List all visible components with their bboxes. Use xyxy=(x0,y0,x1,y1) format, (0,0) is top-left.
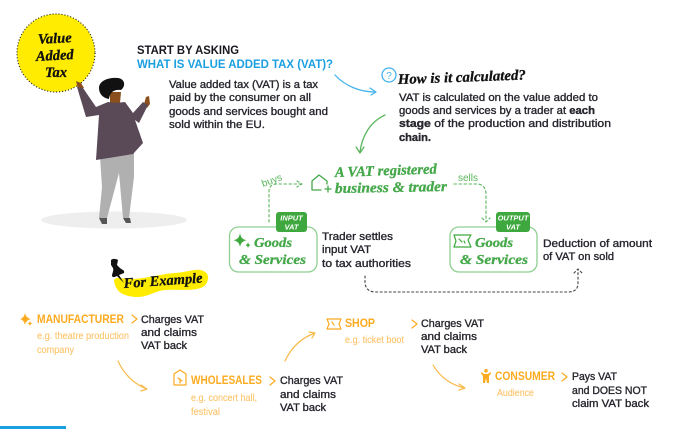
icon: question mark xyxy=(382,68,396,82)
step: manufacturer: Charges VAT xyxy=(141,314,204,326)
step: wholesales: e.g. concert hall, xyxy=(191,393,257,404)
step: consumer: CONSUMER xyxy=(495,371,556,383)
icon: question mark: ? xyxy=(386,71,392,82)
text block: VAT definition: paid by the consumer on all xyxy=(169,92,311,104)
label: goods and services xyxy=(239,236,307,268)
step: shop xyxy=(327,318,484,356)
step: manufacturer: e.g. theatre production xyxy=(37,331,129,342)
arrow: wholesales to shop xyxy=(285,332,315,361)
step: wholesales xyxy=(174,370,343,418)
step: wholesales: Charges VAT xyxy=(280,375,343,387)
heading: for example xyxy=(111,259,208,297)
tag: input VAT: INPUT xyxy=(280,214,304,222)
step: wholesales: and claims xyxy=(280,389,337,401)
label: goods and services: & Services xyxy=(460,253,529,268)
badge: value added tax: Value xyxy=(37,30,73,48)
icon: sparkle xyxy=(20,313,33,326)
text block: VAT definition: Value added tax (VAT) is a tax xyxy=(169,79,318,91)
heading: start by asking xyxy=(137,43,333,71)
text block: VAT definition: goods and services bought and xyxy=(169,106,328,118)
step: shop: VAT back xyxy=(421,344,467,356)
label: goods and services xyxy=(460,236,529,268)
icon: ticket xyxy=(327,319,341,329)
tag: input VAT xyxy=(276,212,307,232)
text block: deduction xyxy=(543,238,652,263)
step: shop: e.g. ticket boot xyxy=(345,335,404,346)
icon: person xyxy=(481,369,491,383)
text block: calculation explanation: VAT is calculated on the value added to xyxy=(399,92,598,104)
step: manufacturer: and claims xyxy=(141,327,198,339)
heading: start by asking: WHAT IS VALUE ADDED TAX (VAT)? xyxy=(137,57,333,71)
arrow: shop to consumer xyxy=(433,365,465,390)
arrow: sells: sells xyxy=(458,173,478,184)
label: goods and services: Goods xyxy=(254,236,293,251)
tag: input VAT: VAT xyxy=(285,222,300,232)
step: shop: and claims xyxy=(421,331,478,343)
icon: house xyxy=(312,175,331,192)
tag: output VAT: OUTPUT xyxy=(498,214,530,222)
icon: push pin xyxy=(111,259,124,283)
label: goods and services: & Services xyxy=(239,253,307,268)
heading: VAT registered trader: A VAT registered xyxy=(334,161,438,181)
arrow: buys xyxy=(260,172,302,222)
text block: trader settles: to tax authorities xyxy=(322,258,412,270)
step: manufacturer xyxy=(20,313,204,356)
arrow: blue to calculation xyxy=(335,75,376,95)
heading: for example: For Example xyxy=(122,270,204,292)
step: manufacturer: VAT back xyxy=(141,340,187,352)
text block: deduction: of VAT on sold xyxy=(543,251,614,263)
step: consumer: claim VAT back xyxy=(572,398,650,410)
arrow: manufacturer to wholesales xyxy=(118,361,147,391)
text block: calculation explanation: goods and services by a trader at each xyxy=(399,105,595,117)
heading: how is it calculated: How is it calculated? xyxy=(397,68,526,88)
arrow: sells xyxy=(454,173,490,222)
badge: value added tax: Added xyxy=(34,47,75,65)
heading: VAT registered trader: business & trader xyxy=(335,179,447,197)
badge: value added tax xyxy=(17,14,95,92)
text block: VAT definition xyxy=(169,79,328,131)
step: wholesales: festival xyxy=(191,407,220,418)
step: manufacturer: company xyxy=(37,345,74,356)
step: consumer: and DOES NOT xyxy=(572,385,647,397)
badge: value added tax: Tax xyxy=(45,65,67,81)
tag: output VAT xyxy=(496,212,530,232)
icon: house xyxy=(174,370,186,385)
text block: trader settles: input VAT xyxy=(322,244,371,256)
arrow: settlement loop xyxy=(365,269,582,292)
step: shop: SHOP xyxy=(345,318,375,330)
icon: ticket xyxy=(454,235,471,247)
label: goods and services: Goods xyxy=(475,236,514,251)
panel: input goods and services xyxy=(230,212,317,272)
arrow: buys: buys xyxy=(260,172,284,190)
heading: start by asking: START BY ASKING xyxy=(137,43,239,57)
icon: sparkle xyxy=(233,233,251,248)
step: manufacturer: MANUFACTURER xyxy=(37,314,125,326)
heading: VAT registered trader xyxy=(334,161,447,197)
text block: trader settles: Trader settles xyxy=(322,231,394,243)
text block: VAT definition: sold within the EU. xyxy=(169,119,265,131)
step: consumer: Pays VAT xyxy=(572,371,617,383)
text block: calculation explanation xyxy=(399,92,611,144)
text block: calculation explanation: stage of the production and distribution xyxy=(399,118,611,130)
step: consumer xyxy=(481,369,650,410)
step: shop: Charges VAT xyxy=(421,318,484,330)
panel: output goods and services xyxy=(450,212,537,272)
arrow: green to trader xyxy=(356,115,385,153)
text block: trader settles xyxy=(322,231,412,270)
step: wholesales: WHOLESALES xyxy=(191,375,262,387)
text block: calculation explanation: chain. xyxy=(399,132,431,144)
tag: output VAT: VAT xyxy=(506,222,521,232)
step: consumer: Audience xyxy=(497,388,534,399)
text block: deduction: Deduction of amount xyxy=(543,238,652,250)
step: wholesales: VAT back xyxy=(280,402,326,414)
illustration: person holding the badge xyxy=(41,78,187,228)
